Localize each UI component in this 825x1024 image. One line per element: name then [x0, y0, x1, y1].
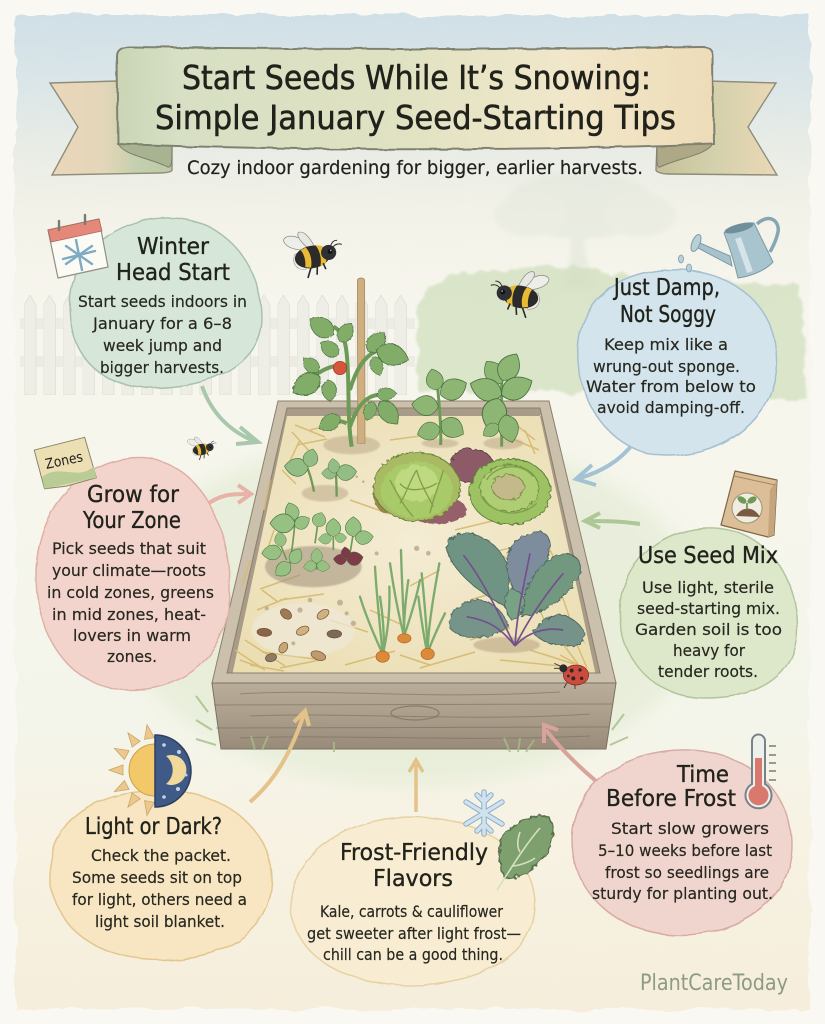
- heading: Just Damp, Not Soggy: Not Soggy: [620, 302, 716, 328]
- heading: Use Seed Mix: Use Seed Mix: [638, 543, 778, 569]
- body text: light soil blanket.: [95, 912, 225, 931]
- body text: sturdy for planting out.: [592, 884, 773, 903]
- heading: Frost-Friendly Flavors: [340, 840, 488, 892]
- body text: [78, 292, 247, 377]
- heading: Grow for Your Zone: Grow for: [87, 482, 180, 508]
- arrow: Time Before Frost: [544, 725, 597, 782]
- body text: in mid zones, heat-: [52, 605, 206, 624]
- body text: in cold zones, greens: [47, 583, 214, 602]
- straw strands: [235, 420, 587, 671]
- body text: Check the packet.: [91, 846, 231, 865]
- body text: zones.: [107, 647, 157, 666]
- panel: Winter Head Start: [48, 215, 262, 388]
- title: Start Seeds While It’s Snowing:: [182, 58, 651, 97]
- title ribbon: [50, 47, 777, 175]
- ladybug: [554, 663, 589, 689]
- arrow: Winter Head Start: [202, 386, 258, 444]
- title: Simple January Seed-Starting Tips: [155, 98, 676, 137]
- background garden scenery: [20, 171, 808, 785]
- bed front board: [212, 683, 616, 749]
- icon: zones map: Zones: [44, 449, 84, 473]
- pepper plants: [411, 349, 537, 447]
- icon: bumblebee right: [487, 266, 550, 320]
- heading: Time Before Frost: Before Frost: [606, 786, 736, 812]
- bed plants: [252, 278, 589, 689]
- icon: calendar: [48, 215, 108, 278]
- heading: Winter Head Start: Winter: [137, 234, 210, 260]
- body text: wrung-out sponge.: [593, 357, 740, 376]
- arrow: Grow for Your Zone: [205, 485, 251, 506]
- body text: lovers in warm: [73, 626, 191, 645]
- heading: Frost-Friendly Flavors: Frost-Friendly: [340, 840, 488, 866]
- panel: Just Damp, Not Soggy: [578, 219, 778, 456]
- cabbage: [469, 459, 551, 524]
- heading: Grow for Your Zone: Your Zone: [82, 508, 181, 534]
- icon: watering can: [678, 219, 778, 278]
- bed soil and straw: [227, 408, 600, 676]
- panel: Use Seed Mix: [620, 471, 797, 698]
- heading: Time Before Frost: Time: [676, 762, 729, 788]
- bed rim: [212, 401, 616, 683]
- heading: Winter Head Start: Head Start: [116, 260, 230, 286]
- tomato plant: [287, 311, 412, 447]
- sprouts: [284, 447, 357, 497]
- heading: Frost-Friendly Flavors: Flavors: [373, 866, 453, 892]
- body text: Keep mix like a: [604, 335, 728, 354]
- body text: bigger harvests.: [100, 358, 224, 377]
- ribbon tails: [50, 81, 172, 175]
- arrow: Just Damp: [576, 440, 636, 485]
- heading: Just Damp, Not Soggy: [612, 275, 720, 328]
- tree: [494, 171, 676, 290]
- heading: Light or Dark?: Light or Dark?: [85, 814, 222, 840]
- raised garden bed: [196, 278, 628, 752]
- body text: for light, others need a: [72, 890, 247, 909]
- lawn: [120, 435, 700, 785]
- body text: Use light, sterile: [642, 578, 774, 597]
- icon: thermometer: [746, 735, 776, 808]
- icon: sun and moon: [109, 724, 191, 816]
- body text: your climate—roots: [52, 561, 206, 580]
- pebbles: [265, 475, 431, 645]
- heading: Just Damp, Not Soggy: Just Damp,: [612, 275, 720, 301]
- body text: chill can be a good thing.: [323, 945, 503, 964]
- stake: [357, 278, 365, 443]
- carrots and onion tops: [360, 550, 445, 653]
- icon: bumblebee top: [283, 225, 347, 281]
- body text: Some seeds sit on top: [72, 868, 242, 887]
- seedling cluster: [261, 500, 374, 580]
- body text: [635, 578, 782, 681]
- body text: [586, 335, 756, 417]
- icon: zones map: [34, 437, 97, 491]
- subtitle: Cozy indoor gardening for bigger, earlier harvests.: [187, 157, 643, 179]
- body text: 5–10 weeks before last: [598, 841, 772, 860]
- body text: [307, 902, 521, 964]
- purple lettuce: [450, 449, 493, 483]
- body text: heavy for: [673, 641, 745, 660]
- hedge: [417, 267, 808, 400]
- body text: Start slow growers: [611, 819, 769, 838]
- icon: snowflake: [466, 792, 502, 834]
- panel: Frost-Friendly Flavors: [291, 792, 552, 985]
- arrow: Light or Dark: [250, 711, 309, 802]
- body text: Water from below to: [586, 377, 756, 396]
- arrow: Use Seed Mix: [585, 513, 640, 528]
- panel: Grow for Your Zone: [34, 437, 230, 690]
- icon: seed packet: [721, 471, 777, 537]
- body text: [47, 539, 214, 666]
- arrow: Frost-Friendly Flavors: [409, 760, 423, 812]
- body text: week jump and: [103, 336, 222, 355]
- ribbon main band: [117, 47, 714, 149]
- body text: Garden soil is too: [635, 620, 782, 639]
- title: [155, 58, 676, 137]
- panel: Time Before Frost: [572, 735, 792, 935]
- kale: [447, 532, 584, 646]
- leaf lettuce: [373, 453, 467, 524]
- seeds: [257, 607, 342, 663]
- body text: avoid damping-off.: [597, 398, 745, 417]
- body text: frost so seedlings are: [605, 863, 769, 882]
- body text: get sweeter after light frost—: [307, 924, 521, 943]
- heading: Time Before Frost: [606, 762, 736, 812]
- soil patches: [302, 436, 523, 502]
- bed inner walls: [213, 402, 615, 683]
- body text: Start seeds indoors in: [78, 292, 247, 311]
- watermark: PlantCareToday: [640, 971, 788, 996]
- body text: seed-starting mix.: [637, 599, 780, 618]
- body text: Pick seeds that suit: [52, 539, 206, 558]
- panel: Light or Dark?: [50, 724, 272, 960]
- icon: small bee: [187, 434, 219, 462]
- body text: January for a 6–8: [92, 314, 232, 333]
- heading: Grow for Your Zone: [82, 482, 181, 534]
- body text: [72, 846, 247, 931]
- grass tufts: [196, 696, 628, 752]
- fence: [20, 295, 415, 395]
- body text: [592, 819, 773, 903]
- icon: kale leaf: [497, 816, 552, 890]
- body text: tender roots.: [658, 662, 758, 681]
- heading: Winter Head Start: [116, 234, 230, 286]
- body text: Kale, carrots & cauliflower: [320, 902, 503, 921]
